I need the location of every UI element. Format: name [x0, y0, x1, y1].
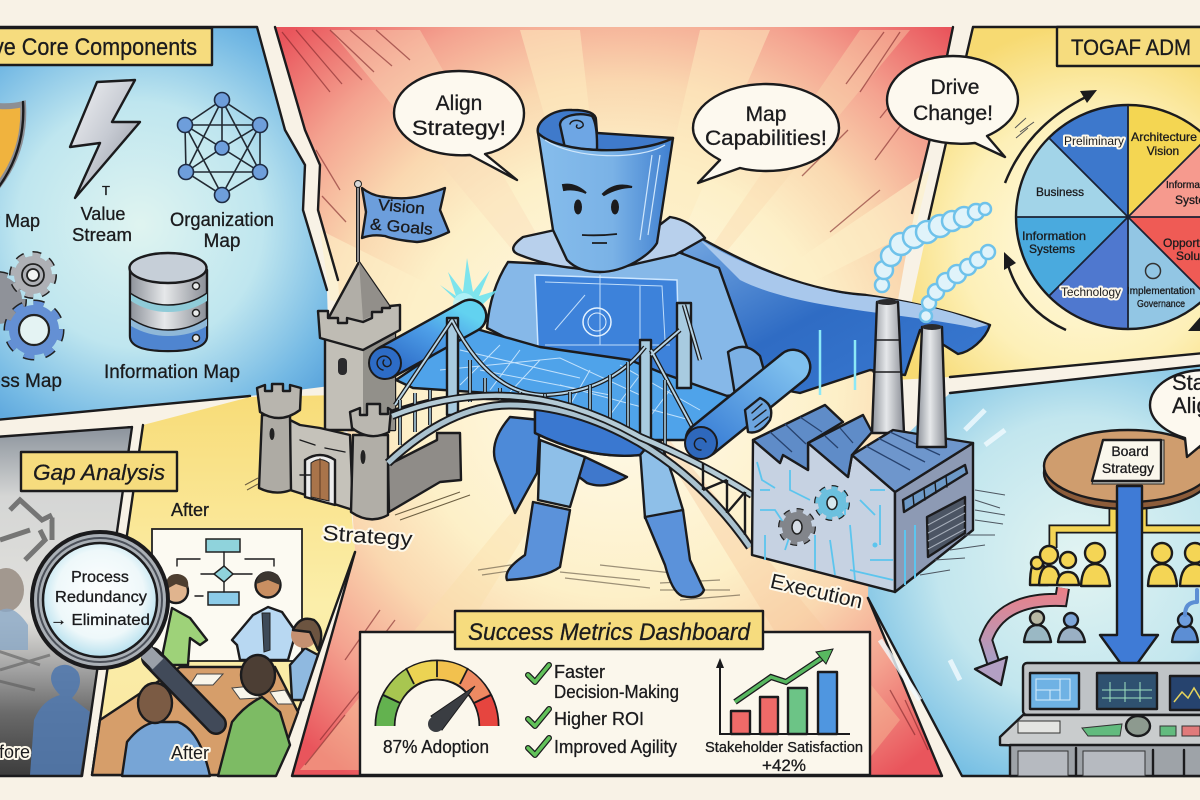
hero torso and arms — [487, 250, 768, 456]
icon: organization network map: Map — [204, 231, 240, 252]
arrow: cycle lower left — [1004, 252, 1066, 330]
factory windows — [903, 465, 967, 512]
bridge deck arches — [388, 396, 752, 547]
speech bubble: drive change: Drive — [930, 76, 980, 99]
castle ground hatching — [245, 478, 470, 520]
hero: blueprint superhero — [487, 110, 990, 597]
panel: gap analysis before — [0, 427, 132, 776]
panel: governance board to operations — [868, 365, 1200, 776]
speech bubble: align strategy — [394, 71, 524, 180]
second chimney — [917, 324, 946, 447]
staff figures — [1024, 590, 1198, 642]
board strategy document: Board — [1111, 443, 1149, 459]
icon: organization network map — [170, 92, 274, 252]
label: execution: Execution — [768, 570, 865, 613]
factory ground hatching — [920, 490, 1005, 575]
heading: TOGAF ADM — [1057, 27, 1200, 66]
factory chimneys — [872, 299, 904, 433]
factory garage door — [927, 497, 965, 557]
chart: ADM phase wheel: Information — [1022, 229, 1086, 243]
icon: magnifying glass callout: Redundancy — [55, 589, 147, 606]
blueprint sheet — [396, 328, 730, 440]
icon: database information map: Information Map — [104, 362, 240, 383]
hero cape — [494, 220, 990, 513]
heading: success metrics dashboard — [455, 611, 763, 649]
speech bubble: drive change: Change! — [913, 102, 993, 125]
chart: stakeholder satisfaction bars: Stakeholder Satisfaction — [705, 740, 863, 756]
flag: vision and goals — [354, 180, 449, 262]
chart: stakeholder satisfaction bars: +42% — [762, 756, 806, 775]
icon: lightning value stream: Value — [81, 204, 125, 224]
chart: adoption gauge — [383, 660, 491, 757]
speech bubble: map capabilities — [693, 84, 839, 183]
arrow: cycle upper left — [1005, 90, 1097, 183]
chart: ADM phase wheel: Vision — [1147, 144, 1179, 158]
whiteboard with flowchart — [152, 529, 302, 661]
hero collar — [513, 217, 705, 272]
factory body — [752, 405, 973, 592]
strategy castle — [245, 180, 470, 551]
heading: gap analysis — [21, 452, 177, 491]
checklist: outcomes: Faster — [554, 662, 605, 682]
label: strategy: Strategy — [322, 522, 414, 551]
chart: adoption gauge: 87% Adoption — [383, 737, 489, 757]
icon: magnifying glass callout: → Eliminated — [50, 612, 150, 629]
checklist: outcomes: Decision-Making — [554, 682, 679, 702]
speech bubble: stay aligned — [1150, 370, 1200, 457]
speech bubble: map capabilities: Capabilities! — [705, 127, 827, 150]
chart: ADM phase wheel: Technology — [1061, 285, 1121, 299]
castle main tower — [318, 262, 400, 430]
glowing spark — [440, 258, 498, 315]
heading: success metrics dashboard: Success Metrics Dashboard — [468, 619, 751, 646]
people at table — [122, 655, 290, 776]
hero legs and boots — [506, 440, 704, 597]
panel: TOGAF ADM — [895, 27, 1200, 380]
red curved arrow — [975, 588, 1063, 685]
chart: ADM phase wheel: Governance — [1137, 299, 1185, 310]
castle front wall — [290, 420, 353, 510]
chart: ADM phase wheel: Systems — [1029, 242, 1075, 256]
panel: strategy-to-execution hero background — [275, 27, 953, 776]
chart: ADM phase wheel — [1016, 105, 1200, 329]
hero ground shadow — [478, 562, 740, 600]
scroll right roll with hand — [685, 367, 793, 459]
icon: lightning value stream: Stream — [72, 225, 132, 245]
panel: success metrics dashboard — [360, 611, 870, 775]
panel: five core components — [0, 27, 330, 420]
heading: gap analysis: Gap Analysis — [33, 460, 165, 485]
chart: ADM phase wheel: Implementation — [1127, 286, 1195, 297]
chart: ADM phase wheel: Architecture — [1131, 130, 1197, 144]
flag: vision and goals: Vision — [377, 197, 426, 218]
flag: vision and goals: & Goals — [369, 216, 434, 239]
bridge towers and cables — [395, 303, 700, 450]
chart: ADM phase wheel: Preliminary — [1064, 134, 1124, 148]
boardroom table — [1044, 430, 1200, 509]
blueprint bridge and scroll — [369, 258, 793, 547]
hero head scroll — [538, 110, 673, 272]
people presenting — [162, 572, 321, 700]
icon: lightning value stream: T — [102, 183, 110, 198]
icon: magnifying glass callout — [32, 532, 216, 724]
factory gears — [782, 489, 846, 542]
bridge back rail — [392, 397, 640, 438]
icon: gears business process map — [0, 256, 62, 392]
board strategy document — [1092, 440, 1164, 484]
icon: shield with capability map label — [0, 100, 40, 231]
smoke plumes — [875, 203, 995, 322]
icon: database information map — [104, 253, 240, 383]
castle left turret — [257, 384, 301, 493]
meeting table — [92, 667, 298, 775]
factory circuit traces — [757, 462, 893, 580]
speech bubble: map capabilities: Map — [746, 103, 786, 126]
people at table: After — [171, 743, 209, 763]
icon: magnifying glass callout: Process — [71, 569, 129, 586]
chart: stakeholder satisfaction bars — [705, 649, 863, 775]
control console — [1000, 663, 1200, 776]
checklist: outcomes: Higher ROI — [554, 709, 644, 729]
board strategy document: Strategy — [1102, 460, 1154, 476]
speech bubble: drive change — [887, 56, 1018, 157]
speech bubble: align strategy: Align — [436, 92, 482, 115]
blue strategy arrow — [1100, 486, 1158, 675]
castle right turret — [350, 404, 391, 519]
speech bubble: align strategy: Strategy! — [412, 117, 506, 140]
org chart connectors — [1053, 505, 1200, 548]
checklist: outcomes: Improved Agility — [554, 737, 677, 757]
heading: TOGAF ADM: TOGAF ADM — [1071, 35, 1191, 60]
panel: gap analysis after — [92, 395, 355, 776]
execution factory — [752, 203, 1005, 613]
checklist: outcomes — [528, 662, 679, 757]
hero face — [563, 185, 632, 243]
stakeholder figures — [1030, 543, 1200, 586]
panel: gap analysis after: After — [171, 500, 209, 520]
arrow: cycle lower right — [1188, 315, 1200, 331]
icon: organization network map: Organization — [170, 210, 274, 231]
castle back wall — [388, 433, 461, 512]
icon: lightning value stream — [70, 80, 140, 245]
chart: ADM phase wheel: Business — [1036, 185, 1084, 199]
scroll left roll — [369, 316, 470, 379]
